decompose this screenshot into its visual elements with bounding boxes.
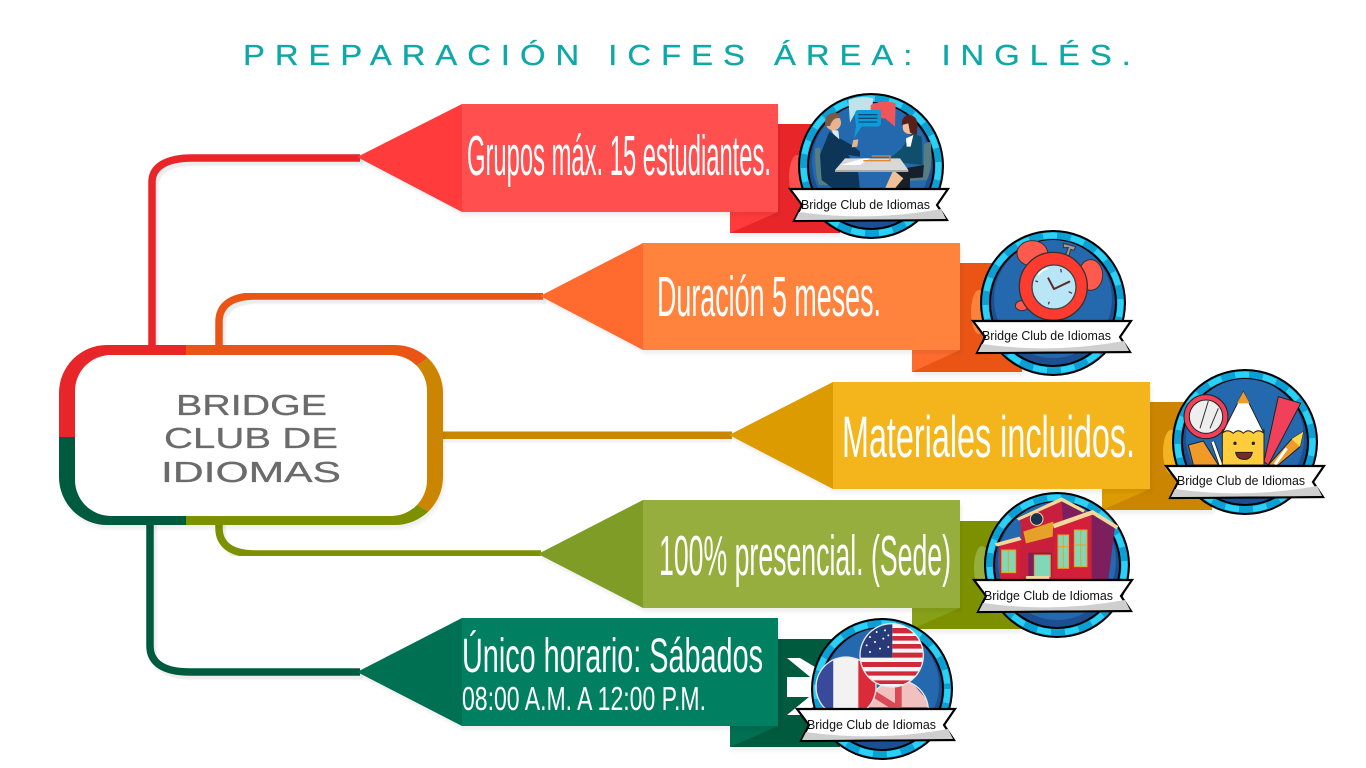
panel: duration banner: Duración 5 meses. [657,265,881,329]
panel: schedule banner [357,618,840,747]
ribbon: building badge: Bridge Club de Idiomas [984,589,1113,603]
panel: schedule banner: 08:00 A.M. A 12:00 P.M. [462,680,706,717]
panel: presencial banner [538,500,1022,629]
panel: presencial banner: 100% presencial. (Sede) [659,524,951,588]
ribbon: flags badge [797,709,955,741]
badge: alarm clock [980,230,1126,376]
ribbon: flags badge: Bridge Club de Idiomas [807,718,936,732]
panel: materials banner: Materiales incluidos. [842,405,1135,470]
central box: Bridge Club de Idiomas: BRIDGE [176,390,327,422]
icon: white chevrons [787,658,815,715]
ribbon: supplies badge: Bridge Club de Idiomas [1177,474,1305,488]
panel: schedule banner: Único horario: Sábados [462,629,763,683]
panel: duration banner [540,243,1022,372]
ribbon: clock badge [973,321,1131,353]
badge: conversation [798,93,944,239]
ribbon: conversation badge [790,189,948,221]
title: PREPARACIÓN ICFES ÁREA: INGLÉS. [243,39,1131,71]
central box: Bridge Club de Idiomas: CLUB DE [164,423,338,455]
connector: orange to duration [219,296,543,350]
badge: flags [811,618,953,760]
connector: red to groups [152,158,360,350]
badge: school supplies [1172,369,1318,515]
connector: green to schedule [150,520,360,672]
panel: groups banner [357,104,840,233]
ribbon: clock badge: Bridge Club de Idiomas [982,329,1111,343]
ribbon: conversation badge: Bridge Club de Idiomas [801,198,930,212]
central box: Bridge Club de Idiomas: IDIOMAS [161,457,341,489]
panel: materials banner [729,382,1212,510]
central box: Bridge Club de Idiomas [59,345,443,525]
connector: gold to materials [440,432,732,442]
panel: groups banner: Grupos máx. 15 estudiantes. [467,124,771,188]
connector: olive to presencial [219,520,541,554]
badge: school building [984,492,1130,638]
ribbon: building badge [974,580,1132,612]
ribbon: supplies badge [1166,466,1324,498]
